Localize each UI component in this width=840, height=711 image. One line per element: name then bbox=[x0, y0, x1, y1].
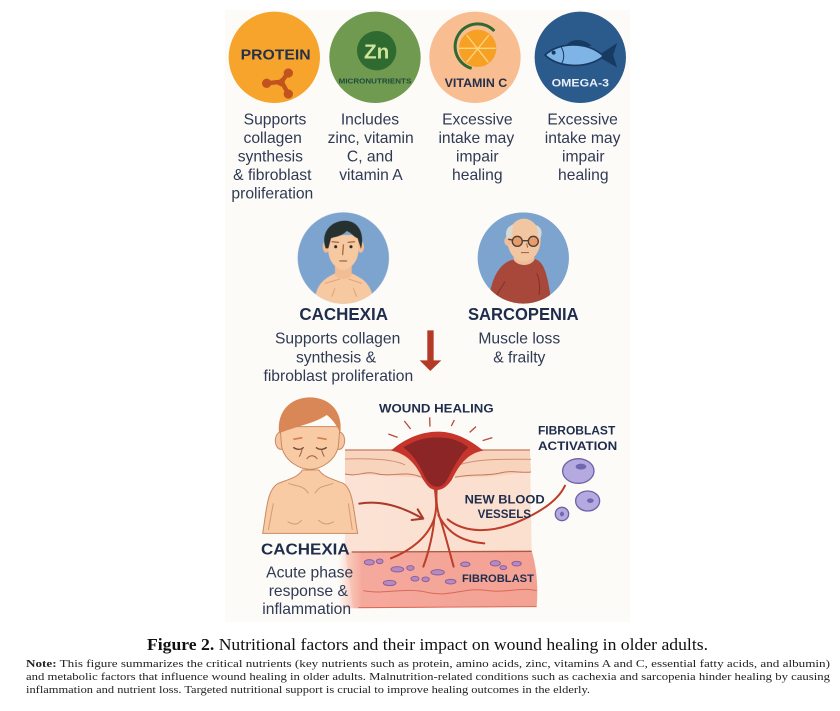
text: cachexia description: synthesis & bbox=[296, 349, 377, 366]
text: vitamin C description: intake may bbox=[438, 130, 514, 147]
text: omega-3 description: Excessive bbox=[547, 111, 618, 128]
text: note: and metabolic factors that influence wound healing in older adults. Malnutrition-related conditions such as cachexia and sarcopenia hinder healing by causing bbox=[26, 671, 831, 683]
icon: cachexia patient bbox=[263, 397, 358, 533]
icon: sarcopenia portrait bbox=[478, 212, 569, 305]
icon: fibroblast cells in tissue bbox=[364, 559, 521, 586]
panel: infographic background bbox=[225, 10, 630, 622]
arrow: to wound bbox=[359, 503, 423, 520]
text: cachexia description: fibroblast proliferation bbox=[263, 368, 413, 385]
panel: nutrients row bbox=[229, 12, 626, 203]
text: protein description: Supports bbox=[244, 111, 306, 128]
text: vitamin C description: healing bbox=[452, 167, 503, 184]
text: sarcopenia description: Muscle loss bbox=[478, 330, 560, 347]
text: acute phase description: Acute phase bbox=[266, 564, 353, 581]
text: protein description: collagen bbox=[243, 130, 302, 147]
label: fibroblast activation: ACTIVATION bbox=[538, 439, 617, 453]
text: omega-3 description: intake may bbox=[545, 130, 621, 147]
text: micronutrients description: vitamin A bbox=[339, 167, 403, 184]
icon: wound rays bbox=[388, 417, 492, 441]
label: fibroblast: FIBROBLAST bbox=[462, 573, 534, 585]
text: note: inflammation and nutrient loss. Targeted nutritional support is crucial to improve healing outcomes in the elderly. bbox=[26, 684, 590, 696]
heading: cachexia: CACHEXIA bbox=[299, 304, 388, 324]
text: omega-3 description: healing bbox=[558, 167, 609, 184]
icon: vitamin C circle bbox=[429, 12, 521, 103]
panel: wound healing illustration bbox=[261, 397, 617, 618]
chart: skin cross-section bbox=[338, 417, 565, 608]
icon: micronutrients circle: MICRONUTRIENTS bbox=[339, 76, 411, 85]
icon: omega-3 circle bbox=[535, 12, 626, 103]
label: fibroblast activation: FIBROBLAST bbox=[538, 424, 616, 438]
text: micronutrients description: zinc, vitamin bbox=[328, 130, 414, 147]
text: note bbox=[26, 658, 831, 696]
arrow: down bbox=[420, 330, 441, 371]
text: note: Note: This figure summarizes the critical nutrients (key nutrients such as protein, amino acids, zinc, vitamins A and C, essential fatty acids, and albumin) bbox=[26, 658, 830, 670]
icon: cachexia portrait bbox=[298, 212, 389, 305]
text: sarcopenia description: & frailty bbox=[493, 349, 546, 366]
text: acute phase description: inflammation bbox=[262, 601, 351, 618]
icon: activated fibroblast cells bbox=[555, 459, 600, 521]
text: acute phase description: response & bbox=[269, 583, 348, 600]
text: cachexia description: Supports collagen bbox=[275, 330, 400, 347]
icon: protein circle: PROTEIN bbox=[241, 48, 311, 64]
heading: sarcopenia: SARCOPENIA bbox=[468, 304, 579, 324]
text: micronutrients description: Includes bbox=[341, 111, 399, 128]
icon: wound bbox=[391, 432, 483, 490]
text: micronutrients description: C, and bbox=[347, 149, 393, 166]
icon: protein circle bbox=[229, 12, 320, 103]
icon: blood vessels bbox=[391, 486, 565, 567]
heading: cachexia lower: CACHEXIA bbox=[261, 541, 350, 558]
icon: omega-3 circle: OMEGA-3 bbox=[552, 78, 609, 90]
text: protein description: proliferation bbox=[231, 186, 313, 203]
icon: vitamin C circle: VITAMIN C bbox=[445, 76, 508, 90]
text: vitamin C description: impair bbox=[456, 149, 499, 166]
text: vitamin C description: Excessive bbox=[442, 111, 513, 128]
icon: micronutrients circle: Zn bbox=[364, 40, 389, 63]
text: protein description: synthesis bbox=[238, 149, 303, 166]
text: protein description: & fibroblast bbox=[233, 167, 312, 184]
text: omega-3 description: impair bbox=[562, 149, 605, 166]
label: new blood vessels: VESSELS bbox=[478, 507, 531, 521]
panel: conditions row bbox=[263, 212, 579, 385]
heading: wound healing: WOUND HEALING bbox=[379, 402, 494, 416]
label: new blood vessels: NEW BLOOD bbox=[465, 492, 545, 506]
title: figure caption: Figure 2. Nutritional factors and their impact on wound healing in older adults. bbox=[147, 635, 708, 654]
icon: micronutrients circle bbox=[329, 12, 421, 103]
